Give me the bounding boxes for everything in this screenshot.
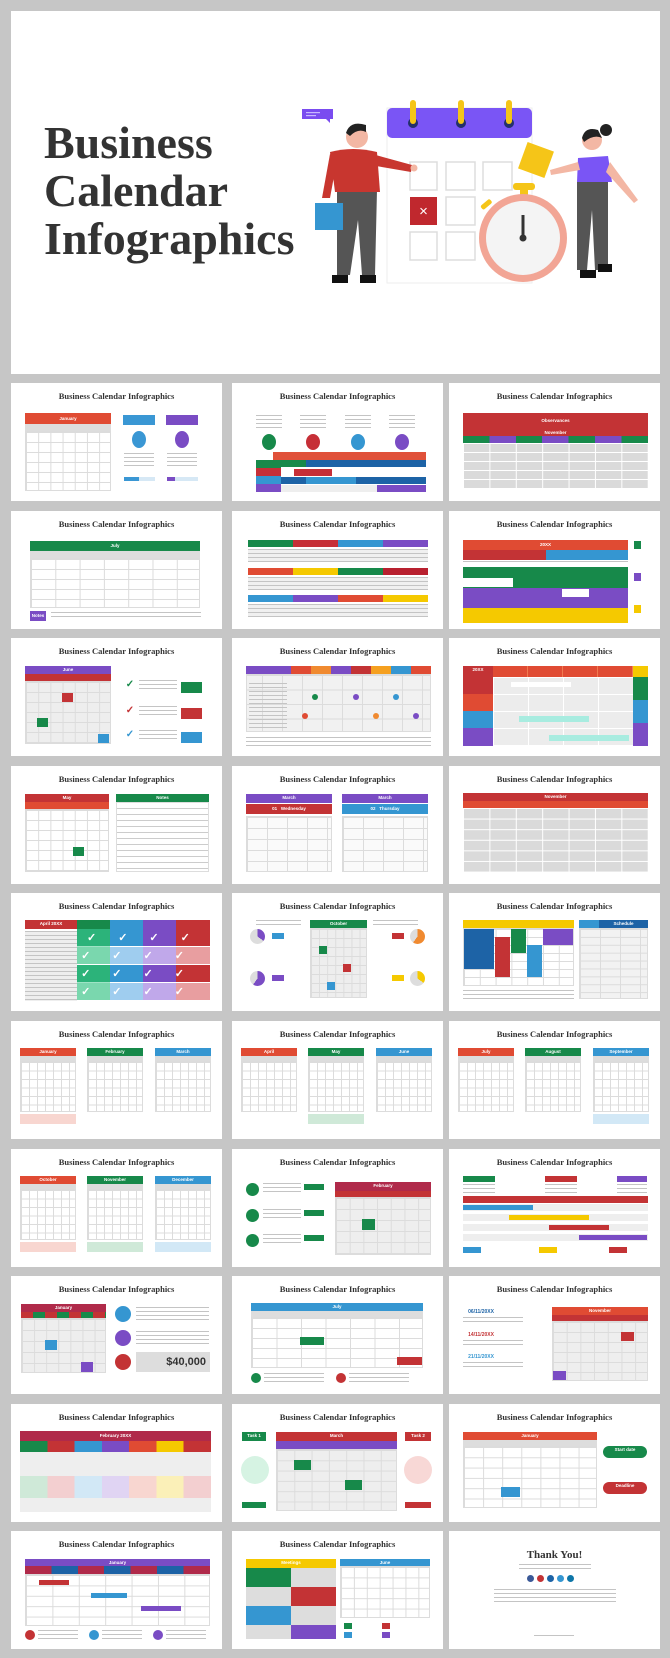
panel: november observances: Observances — [541, 418, 570, 423]
man figure — [315, 124, 418, 283]
panel: january budget: Business Calendar Infographics — [59, 1284, 174, 1294]
panel: november dates: 06/11/20XX — [468, 1309, 494, 1315]
hero title: Business — [44, 117, 213, 168]
panel: 20XX quarter grid: Business Calendar Infographics — [497, 646, 612, 656]
panel: april checks: ✓✓✓✓ — [87, 932, 210, 944]
panel: january tasks — [11, 383, 222, 501]
panel: april checks: ✓✓✓✓ — [81, 968, 206, 980]
panel: 20XX quarter grid — [449, 638, 660, 756]
panel: november gray: November — [544, 794, 566, 799]
panel: march progress: Task 2 — [411, 1433, 425, 1438]
panel: week schedule: Business Calendar Infographics — [497, 901, 612, 911]
panel: may notes: May — [63, 795, 71, 800]
panel: march lists: Business Calendar Infographics — [280, 774, 395, 784]
panel: october pies — [232, 893, 443, 1011]
panel: august schedule — [232, 638, 443, 756]
panel: march lists — [232, 766, 443, 884]
panel: february 20XX week: Business Calendar Infographics — [59, 1412, 174, 1422]
panel: oct-dec calendars — [11, 1149, 222, 1267]
panel: november observances: November — [544, 430, 566, 435]
panel: jan-mar calendars: February — [105, 1049, 125, 1054]
panel: march progress: Business Calendar Infographics — [280, 1412, 395, 1422]
panel: april checks: April 20XX — [40, 921, 62, 926]
panel: 20XX quarter grid: 20XX — [472, 667, 484, 672]
panel: apr-jun calendars: May — [332, 1049, 340, 1054]
panel: week schedule: Schedule — [613, 921, 634, 926]
hero panel — [11, 11, 660, 374]
panel: april checks: ✓✓✓✓ — [81, 986, 206, 998]
panel: january budget — [11, 1276, 222, 1394]
hero illustration — [302, 100, 638, 284]
panel: apr-jun calendars: June — [399, 1049, 409, 1054]
panel: march lists: March — [282, 795, 296, 800]
panel: january budget: $40,000 — [166, 1356, 206, 1368]
panel: january budget: January — [55, 1305, 72, 1310]
panel: jul-sep calendars: September — [609, 1049, 633, 1054]
panel: january start dates: Deadline — [616, 1483, 634, 1488]
panel: oct-dec calendars: Business Calendar Infographics — [59, 1157, 174, 1167]
panel: apr-jun calendars: April — [264, 1049, 274, 1054]
panel: january start dates: Start date — [615, 1447, 635, 1452]
panel: oct-dec calendars: October — [39, 1177, 57, 1182]
panel: march progress: Task 1 — [247, 1433, 261, 1438]
panel: january start dates — [449, 1404, 660, 1522]
panel: thank you: Thank You! — [527, 1549, 582, 1561]
panel: jul-sep calendars — [449, 1021, 660, 1139]
panel: apr-jun calendars: Business Calendar Infographics — [280, 1029, 395, 1039]
panel: november gray: Business Calendar Infographics — [497, 774, 612, 784]
panel: milestones gantt — [449, 1149, 660, 1267]
panel: july notes — [11, 511, 222, 629]
panel: april checks: ✓✓✓✓ — [81, 950, 206, 962]
panel: may notes — [11, 766, 222, 884]
speech bubble — [302, 109, 333, 123]
panel: steps gantt: Business Calendar Infographics — [280, 391, 395, 401]
panel: november dates: Business Calendar Infographics — [497, 1284, 612, 1294]
panel: week schedule — [449, 893, 660, 1011]
panel: meetings june: Meetings — [281, 1560, 301, 1565]
panel: november dates: November — [589, 1308, 611, 1313]
panel: june tasks — [11, 638, 222, 756]
panel: meetings june: June — [380, 1560, 390, 1565]
panel: jul-sep calendars: August — [545, 1049, 561, 1054]
panel: jan-mar calendars: Business Calendar Infographics — [59, 1029, 174, 1039]
panel: jul-sep calendars: July — [481, 1049, 490, 1054]
panel: milestones gantt: Business Calendar Infographics — [497, 1157, 612, 1167]
panel: january start dates: January — [521, 1433, 539, 1438]
panel: january tasks: Business Calendar Infographics — [59, 391, 174, 401]
panel: august schedule: Business Calendar Infographics — [280, 646, 395, 656]
panel: march lists: 02 Thursday — [370, 806, 400, 811]
panel: steps gantt — [232, 383, 443, 501]
panel: april checks: Business Calendar Infographics — [59, 901, 174, 911]
panel: february tasks: Business Calendar Infographics — [280, 1157, 395, 1167]
calendar: × — [419, 203, 428, 220]
panel: november observances — [449, 383, 660, 501]
hero title — [44, 117, 294, 264]
panel: february tasks: February — [373, 1183, 393, 1188]
hero title: Infographics — [44, 213, 294, 264]
panel: 20XX quarters: Business Calendar Infographics — [497, 519, 612, 529]
calendar — [387, 100, 532, 283]
panel: october pies: October — [330, 921, 347, 926]
panel: may notes: Notes — [156, 795, 169, 800]
woman figure — [518, 124, 638, 278]
panel: november observances: Business Calendar Infographics — [497, 391, 612, 401]
panel: jul-sep calendars: Business Calendar Infographics — [497, 1029, 612, 1039]
panel: meetings june — [232, 1531, 443, 1649]
panel: january steps: Business Calendar Infographics — [59, 1539, 174, 1549]
panel: june tasks: June — [63, 667, 73, 672]
panel: february 20XX week: February 20XX — [100, 1433, 131, 1438]
panel: july calendar — [232, 1276, 443, 1394]
panel: november dates — [449, 1276, 660, 1394]
panel: jan-mar calendars — [11, 1021, 222, 1139]
panel: november gray — [449, 766, 660, 884]
stopwatch — [479, 183, 567, 282]
panel: 20XX quarters: 20XX — [540, 542, 551, 547]
panel: may notes: Business Calendar Infographics — [59, 774, 174, 784]
panel: february tasks — [232, 1149, 443, 1267]
panel: october pies: Business Calendar Infographics — [280, 901, 395, 911]
panel: july calendar: Business Calendar Infographics — [280, 1284, 395, 1294]
panel: february 20XX week — [11, 1404, 222, 1522]
panel: july notes: July — [110, 543, 120, 548]
panel: november dates: 21/11/20XX — [468, 1354, 494, 1360]
panel: march lists: March — [378, 795, 392, 800]
panel: march lists: 01 Wednesday — [272, 806, 306, 811]
panel: june tasks: Business Calendar Infographics — [59, 646, 174, 656]
panel: march progress — [232, 1404, 443, 1522]
panel: january tasks: January — [59, 416, 77, 421]
hero title: Calendar — [44, 165, 228, 216]
panel: november dates: 14/11/20XX — [468, 1332, 494, 1338]
panel: months table: Business Calendar Infographics — [280, 519, 395, 529]
panel: april checks — [11, 893, 222, 1011]
panel: jan-mar calendars: March — [176, 1049, 190, 1054]
panel: apr-jun calendars — [232, 1021, 443, 1139]
panel: 20XX quarters — [449, 511, 660, 629]
panel: march progress: March — [330, 1433, 343, 1438]
panel: july calendar: July — [332, 1304, 342, 1309]
panel: july notes: Business Calendar Infographics — [59, 519, 174, 529]
panel: thank you — [449, 1531, 660, 1649]
panel: oct-dec calendars: November — [104, 1177, 126, 1182]
panel: january steps — [11, 1531, 222, 1649]
panel: oct-dec calendars: December — [172, 1177, 194, 1182]
panel: jan-mar calendars: January — [39, 1049, 57, 1054]
panel: meetings june: Business Calendar Infographics — [280, 1539, 395, 1549]
panel: months table — [232, 511, 443, 629]
panel: july notes: Notes — [32, 613, 44, 618]
panel: january start dates: Business Calendar Infographics — [497, 1412, 612, 1422]
panel: january steps: January — [109, 1560, 126, 1565]
